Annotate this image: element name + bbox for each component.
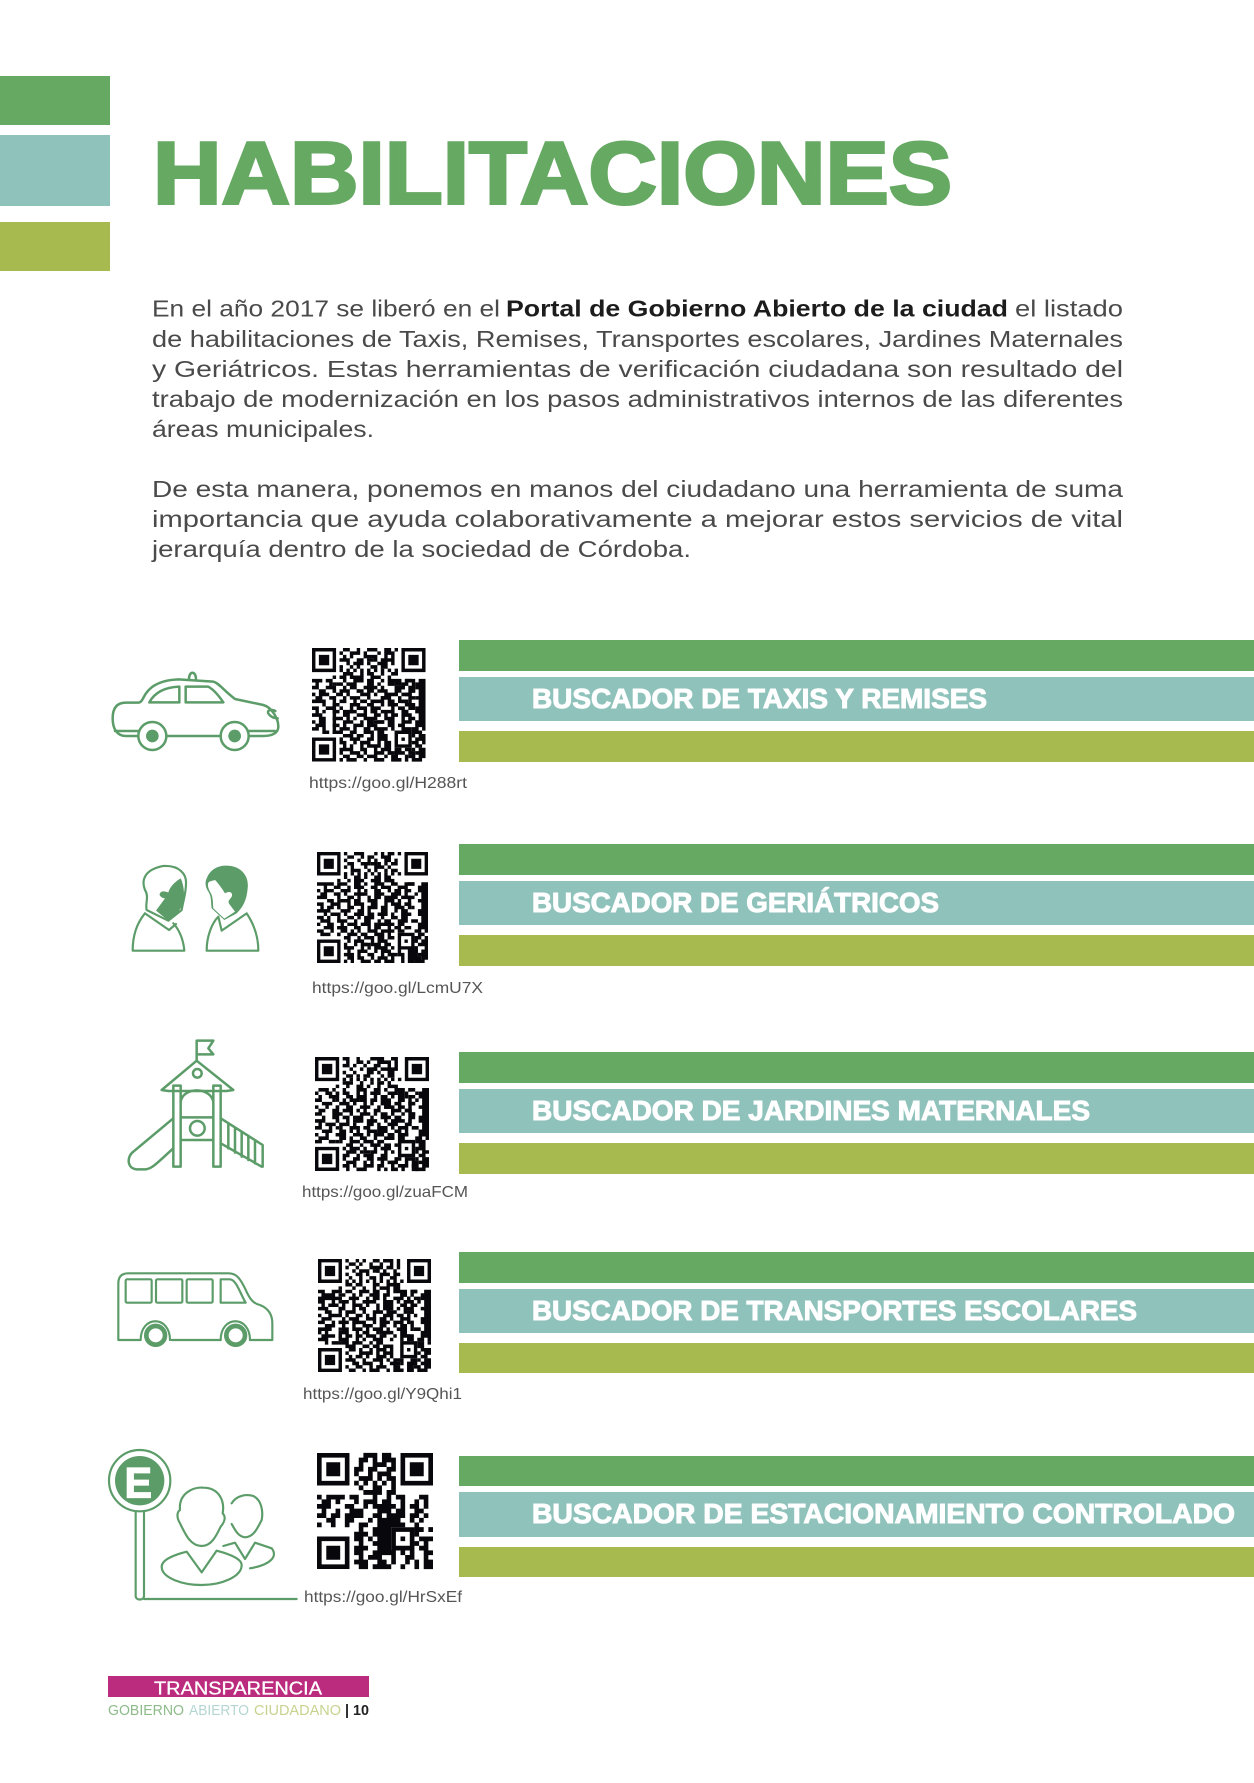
QR code: jardines bbox=[315, 1057, 429, 1171]
banner: estacionamiento bbox=[459, 1456, 1254, 1577]
text block: intro paragraph: áreas municipales. bbox=[152, 416, 374, 442]
footer line bbox=[108, 1702, 369, 1719]
icon: elderly people bbox=[133, 866, 258, 951]
text block: second paragraph: jerarquía dentro de la sociedad de Córdoba. bbox=[151, 536, 691, 562]
text block: intro paragraph: En el año 2017 se liberó en el bbox=[152, 296, 500, 322]
text block: second paragraph: De esta manera, ponemos en manos del ciudadano una herramienta de suma bbox=[152, 476, 1123, 502]
link: transportes: https://goo.gl/Y9Qhi1 bbox=[303, 1386, 462, 1403]
icon: parking sign and people: E bbox=[125, 1460, 152, 1508]
title: HABILITACIONES bbox=[153, 124, 952, 222]
banner: geriátricos bbox=[459, 844, 1254, 966]
banner: jardines bbox=[459, 1052, 1254, 1174]
text block: intro paragraph: trabajo de modernización en los pasos administrativos internos de las diferentes bbox=[152, 386, 1123, 412]
text block: intro paragraph: el listado bbox=[1015, 296, 1123, 322]
panel: jardines maternales bbox=[129, 1041, 1254, 1201]
panel: transportes escolares bbox=[118, 1252, 1254, 1403]
icon: taxi bbox=[113, 673, 278, 750]
text block: intro paragraph: Portal de Gobierno Abierto de la ciudad bbox=[506, 296, 1008, 322]
footer section title: TRANSPARENCIA bbox=[154, 1678, 322, 1698]
icon: school bus bbox=[118, 1273, 272, 1345]
footer bbox=[108, 1676, 369, 1719]
QR code: transportes bbox=[318, 1259, 431, 1372]
text block: second paragraph bbox=[151, 476, 1123, 562]
icon: playground bbox=[129, 1041, 263, 1169]
text block: intro paragraph bbox=[152, 296, 1123, 442]
footer line: | 10 bbox=[345, 1702, 369, 1719]
footer line: GOBIERNO bbox=[108, 1702, 184, 1719]
QR code: taxis bbox=[312, 648, 426, 762]
text block: intro paragraph: de habilitaciones de Taxis, Remises, Transportes escolares, Jardines Maternales bbox=[152, 326, 1123, 352]
panel: estacionamiento controlado bbox=[109, 1450, 1254, 1606]
banner: jardines: BUSCADOR DE JARDINES MATERNALES bbox=[532, 1095, 1090, 1126]
link: estacionamiento: https://goo.gl/HrSxEf bbox=[304, 1589, 463, 1606]
banner: taxis bbox=[459, 640, 1254, 762]
banner: taxis: BUSCADOR DE TAXIS Y REMISES bbox=[532, 683, 987, 714]
link: jardines: https://goo.gl/zuaFCM bbox=[302, 1184, 468, 1201]
footer line: CIUDADANO bbox=[254, 1702, 341, 1719]
banner: transportes bbox=[459, 1252, 1254, 1373]
panel: taxis y remises bbox=[113, 640, 1254, 792]
QR code: geriátricos bbox=[317, 852, 428, 963]
panel: geriátricos bbox=[133, 844, 1254, 997]
footer line: ABIERTO bbox=[189, 1702, 249, 1719]
banner: transportes: BUSCADOR DE TRANSPORTES ESCOLARES bbox=[532, 1295, 1137, 1326]
QR code: estacionamiento bbox=[317, 1453, 433, 1569]
text block: intro paragraph: y Geriátricos. Estas herramientas de verificación ciudadana son resultado del bbox=[152, 356, 1123, 382]
link: geriátricos: https://goo.gl/LcmU7X bbox=[312, 980, 483, 997]
text block: second paragraph: importancia que ayuda colaborativamente a mejorar estos servicios de vital bbox=[152, 506, 1123, 532]
header colour blocks bbox=[0, 76, 110, 271]
link: taxis: https://goo.gl/H288rt bbox=[309, 775, 468, 792]
banner: estacionamiento: BUSCADOR DE ESTACIONAMIENTO CONTROLADO bbox=[532, 1498, 1235, 1529]
footer section band bbox=[108, 1676, 369, 1697]
icon: parking sign and people bbox=[109, 1450, 297, 1599]
banner: geriátricos: BUSCADOR DE GERIÁTRICOS bbox=[532, 887, 939, 918]
